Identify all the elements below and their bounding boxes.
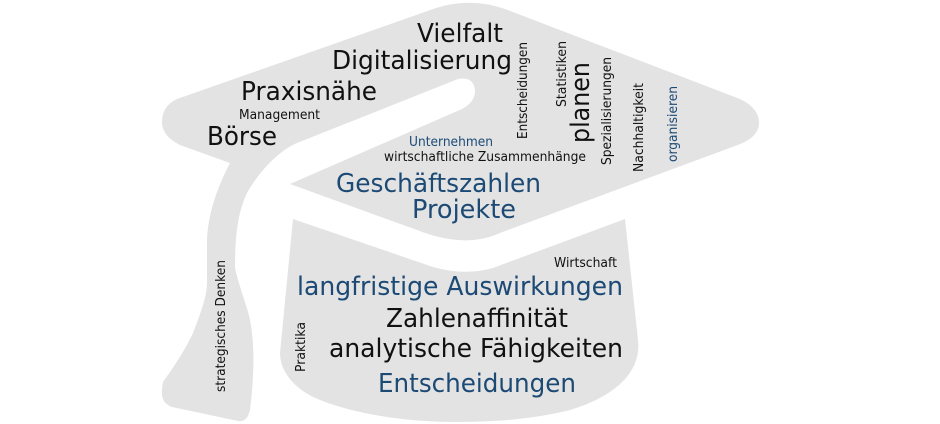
words in the cap board: organisieren <box>665 86 681 162</box>
cap top board and tassel strap <box>162 3 759 421</box>
words in the cap board: Nachhaltigkeit <box>631 83 647 172</box>
word on the strap: strategisches Denken <box>213 260 229 392</box>
words in the cap bowl: Zahlenaffinität <box>386 304 568 334</box>
words in the cap board: Börse <box>207 122 277 152</box>
words in the cap board: planen <box>566 62 596 143</box>
words in the cap board: Unternehmen <box>409 135 493 150</box>
words in the cap bowl <box>293 256 623 399</box>
words in the cap board: wirtschaftliche Zusammenhänge <box>384 150 586 165</box>
words in the cap board: Spezialisierungen <box>599 57 615 165</box>
words in the cap board: Entscheidungen <box>515 42 531 139</box>
words in the cap board: Management <box>239 108 320 123</box>
words in the cap bowl: Entscheidungen <box>378 369 576 399</box>
words in the cap board: Geschäftszahlen <box>336 169 541 199</box>
words in the cap bowl: langfristige Auswirkungen <box>297 272 623 302</box>
words in the cap board <box>207 19 681 225</box>
cap lower bowl <box>280 219 638 422</box>
words in the cap bowl: Praktika <box>293 322 309 372</box>
words in the cap bowl: Wirtschaft <box>554 256 617 271</box>
words in the cap board: Projekte <box>412 195 516 225</box>
words in the cap board: Vielfalt <box>417 19 503 49</box>
words in the cap board: Praxisnähe <box>241 77 377 107</box>
words in the cap bowl: analytische Fähigkeiten <box>329 334 623 364</box>
words in the cap board: Digitalisierung <box>332 46 512 76</box>
words in the cap board: Statistiken <box>554 41 570 107</box>
